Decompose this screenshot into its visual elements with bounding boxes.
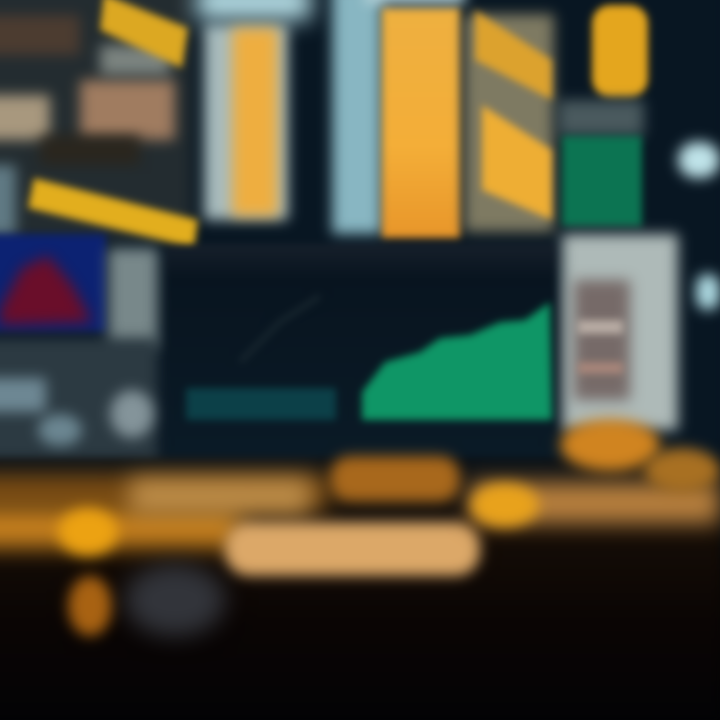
sign: green board [558,100,644,226]
chart: green area [362,302,552,420]
table surface [0,419,720,720]
lights: right side [678,142,720,310]
tower: right [464,10,554,232]
chart: faint line [240,296,320,362]
panel: right white building [562,234,678,430]
sign: yellow banner [28,178,198,248]
group: left panels [0,234,158,460]
background [0,0,720,480]
tower: left [196,0,311,220]
panel: monitor [166,244,556,456]
chart: teal bars [186,388,336,420]
sign: yellow strip top-left [100,0,188,68]
tower: centre [332,0,465,238]
group: top-left building [0,0,192,240]
sign: yellow capsule [592,5,648,97]
